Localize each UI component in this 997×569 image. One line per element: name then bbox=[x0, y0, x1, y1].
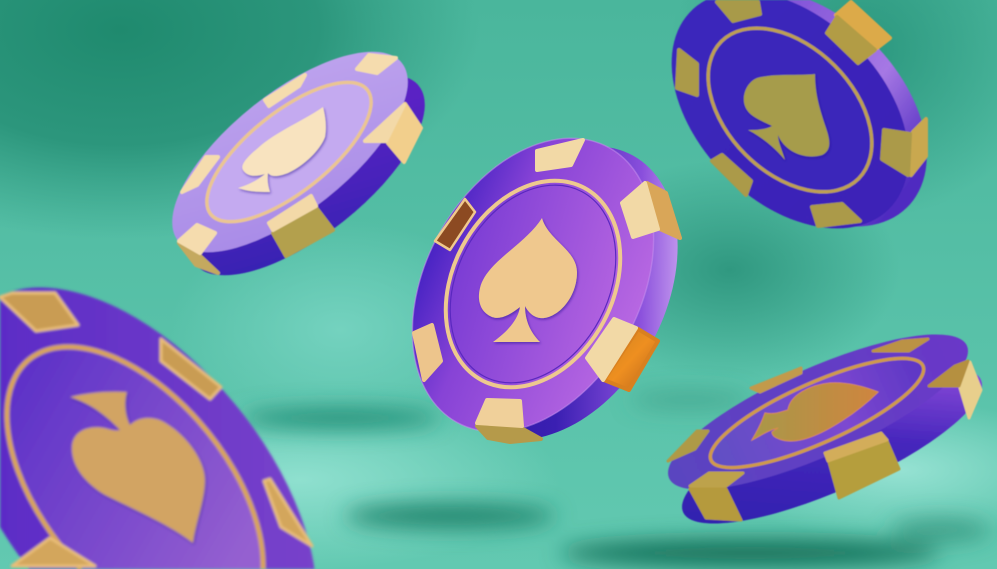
gold ring bbox=[699, 338, 935, 488]
chip: bottom left, large and out of focus bbox=[0, 288, 314, 569]
chip edge bbox=[665, 340, 997, 552]
chip edge bbox=[690, 0, 927, 227]
gold tabs bbox=[0, 293, 312, 566]
gold tabs bbox=[668, 339, 981, 520]
chip: top right, blue bbox=[672, 0, 927, 228]
spade bbox=[752, 383, 878, 441]
gold tabs bbox=[677, 2, 926, 226]
spade bbox=[744, 74, 829, 160]
chip face bbox=[141, 17, 439, 287]
gold tabs bbox=[414, 140, 680, 442]
chip edge bbox=[158, 40, 456, 310]
chip: top left, lilac bbox=[141, 17, 456, 310]
chip: centre, purple bbox=[363, 96, 727, 482]
gold tabs bbox=[179, 55, 421, 273]
spade bbox=[479, 218, 577, 342]
chip face bbox=[0, 288, 314, 569]
chip face bbox=[651, 306, 985, 518]
chip face bbox=[672, 0, 909, 228]
spade bbox=[70, 392, 205, 543]
gold ring bbox=[677, 0, 903, 223]
gold ring bbox=[7, 347, 263, 569]
chip face bbox=[363, 96, 703, 474]
inner ring shadow bbox=[417, 156, 649, 412]
gold ring bbox=[186, 58, 392, 246]
chip: bottom right, nearly edge-on bbox=[651, 306, 997, 552]
spade bbox=[238, 107, 326, 192]
chip edge bbox=[387, 104, 727, 482]
gold ring bbox=[411, 150, 655, 418]
